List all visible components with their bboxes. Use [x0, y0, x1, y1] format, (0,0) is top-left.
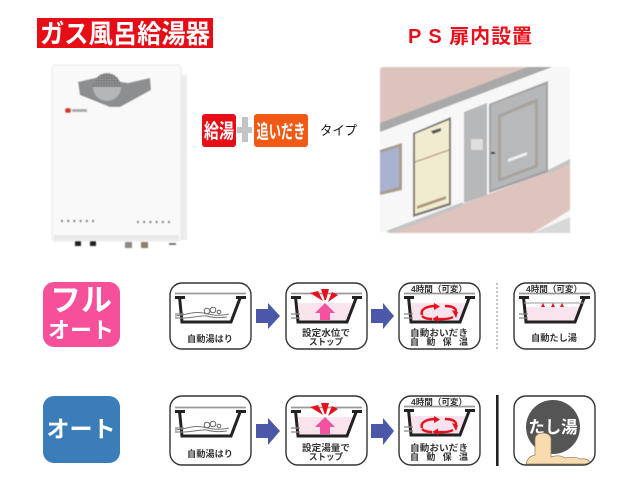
- icon: pressing finger: [526, 433, 590, 464]
- step: full auto, automatic filling: [170, 283, 251, 349]
- badge: auto: [43, 396, 120, 463]
- title: gas bath water heater: ガス風呂給湯器: [40, 19, 210, 49]
- step: stop at set water level: ストップ: [309, 337, 343, 347]
- illustration: apartment corridor: [380, 67, 570, 233]
- step: stop at set water amount: 設定湯量で: [302, 442, 350, 453]
- step: automatic reheating and warming: 自 動 保 温: [410, 336, 468, 347]
- main door: [489, 81, 548, 193]
- button: top-up hot water: [514, 396, 595, 465]
- icon: plus: [237, 117, 252, 142]
- step: automatic reheating and warming: 自 動 保 温: [410, 451, 468, 462]
- badge: full auto: [43, 282, 120, 347]
- step: automatic reheating and warming: 4時間（可変）: [411, 284, 467, 294]
- step: automatic reheating and warming: [399, 396, 480, 465]
- step: stop at set water amount: ストップ: [309, 452, 343, 462]
- label: type: タイプ: [320, 123, 357, 138]
- step: automatic top-up: 4時間（可変）: [526, 284, 582, 294]
- window: [380, 143, 402, 195]
- step: automatic reheating and warming: 4時間（可変）: [411, 397, 467, 407]
- step: full auto, automatic filling: 自動湯はり: [187, 333, 233, 344]
- step: automatic reheating and warming: [399, 283, 480, 349]
- divider: solid bar: [496, 395, 499, 466]
- badge: reheating: 追いだき: [256, 121, 306, 143]
- divider: dotted: [496, 283, 498, 350]
- step: stop at set water amount: [286, 396, 367, 465]
- step: stop at set water level: [286, 283, 367, 349]
- illustration: water heater unit: [52, 65, 187, 248]
- button: top-up hot water: たし湯: [528, 418, 578, 437]
- heading: installed inside PS door: P S 扉内設置: [408, 25, 532, 48]
- badge: auto: オート: [46, 416, 116, 442]
- arrow: [256, 418, 280, 445]
- arrow: [371, 303, 394, 329]
- step: automatic top-up: 自動たし湯: [531, 332, 577, 343]
- arrow: [256, 303, 280, 329]
- badge: full auto: オート: [48, 318, 114, 343]
- step: auto, automatic filling: [170, 396, 251, 465]
- PS door: [413, 117, 451, 217]
- step: automatic reheating and warming: 自動おいだき: [410, 327, 468, 338]
- badge: hot water supply: [202, 114, 236, 147]
- step: stop at set water level: 設定水位で: [302, 327, 350, 338]
- step: auto, automatic filling: 自動湯はり: [187, 448, 233, 459]
- step: automatic reheating and warming: 自動おいだき: [410, 442, 468, 453]
- step: automatic top-up: [514, 283, 595, 349]
- grey side wall: [464, 103, 487, 203]
- arrow: [371, 418, 394, 445]
- badge: full auto: フル: [50, 283, 112, 318]
- badge: reheating: [254, 114, 308, 147]
- badge: hot water supply: 給湯: [204, 120, 234, 143]
